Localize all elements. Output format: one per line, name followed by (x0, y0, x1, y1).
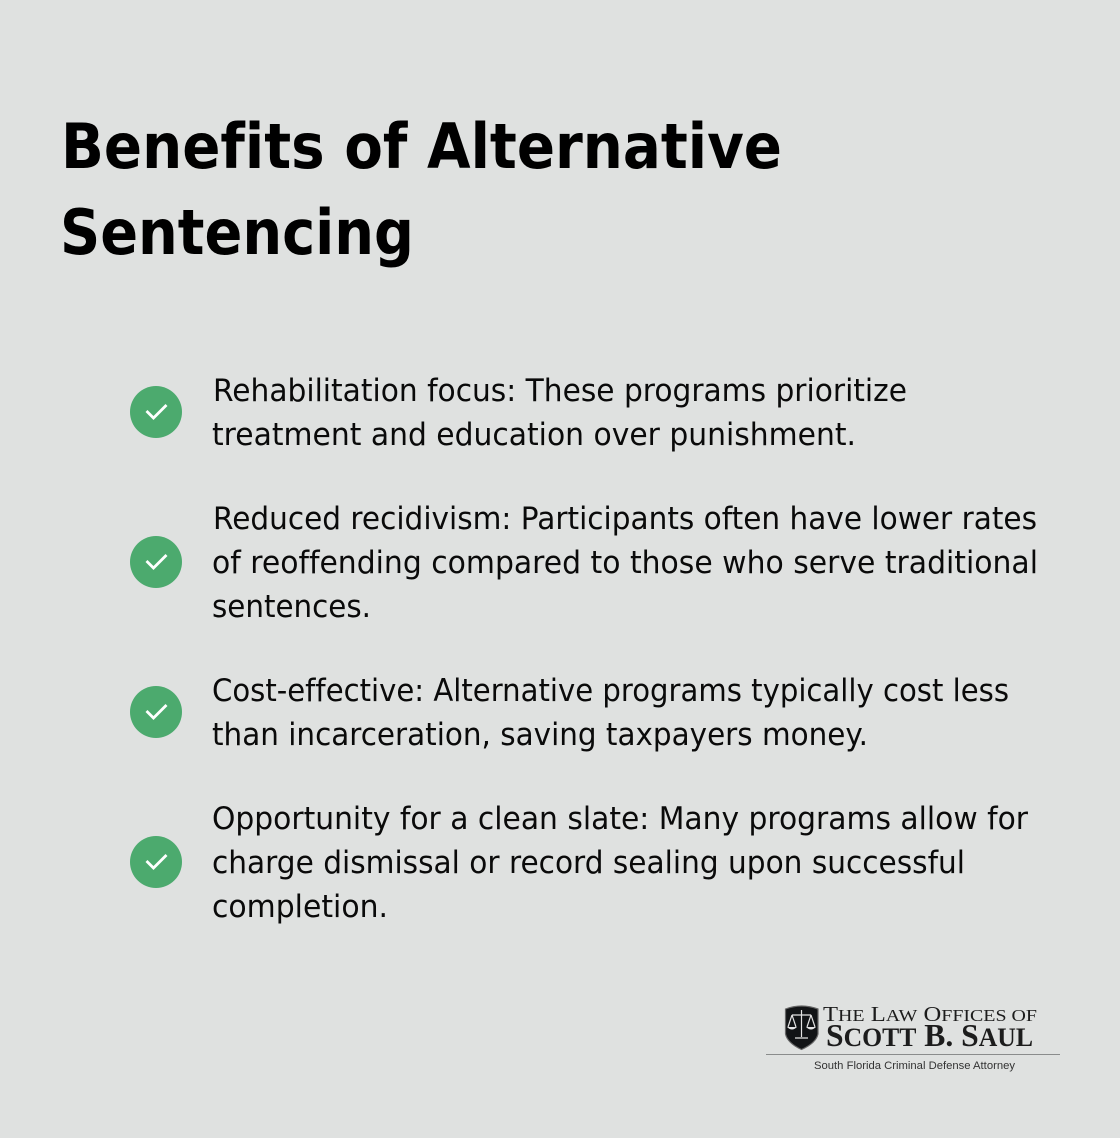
text: rehabilitation focus (212, 373, 907, 453)
icon: green check circle (130, 686, 182, 738)
logo name: THE LAW OFFICES OF (823, 1002, 1037, 1026)
item: clean slate (130, 801, 1028, 925)
text: rehabilitation focus: Rehabilitation focus: These programs prioritize (213, 373, 907, 409)
text: clean slate: charge dismissal or record sealing upon successful (212, 845, 965, 881)
logo: Law Offices of Scott B. Saul (766, 1002, 1060, 1072)
icon: green check circle (130, 536, 182, 588)
text: cost-effective (212, 673, 1009, 753)
item: rehabilitation focus (130, 373, 907, 453)
icon: shield with scales (786, 1006, 818, 1050)
icon: green check circle (130, 836, 182, 888)
title: Sentencing (60, 196, 414, 269)
benefits list (130, 373, 1038, 925)
text: clean slate: completion. (212, 889, 388, 925)
text: reduced recidivism: sentences. (212, 589, 371, 625)
logo divider (766, 1054, 1060, 1055)
text: reduced recidivism: Reduced recidivism: Participants often have lower rates (213, 501, 1037, 537)
text: rehabilitation focus: treatment and education over punishment. (212, 417, 856, 453)
text: cost-effective: Cost-effective: Alternative programs typically cost less (212, 673, 1009, 709)
logo tagline: South Florida Criminal Defense Attorney (814, 1060, 1016, 1072)
logo name (823, 1002, 1037, 1053)
text: cost-effective: than incarceration, saving taxpayers money. (212, 717, 868, 753)
text: reduced recidivism (212, 501, 1038, 625)
item: cost-effective (130, 673, 1009, 753)
text: clean slate: Opportunity for a clean slate: Many programs allow for (212, 801, 1028, 837)
item: reduced recidivism (130, 501, 1038, 625)
icon: green check circle (130, 386, 182, 438)
text: clean slate (212, 801, 1028, 925)
title: Benefits of Alternative (61, 110, 782, 183)
title (60, 110, 782, 269)
text: reduced recidivism: of reoffending compared to those who serve traditional (212, 545, 1038, 581)
logo name: SCOTT B. SAUL (826, 1017, 1033, 1053)
